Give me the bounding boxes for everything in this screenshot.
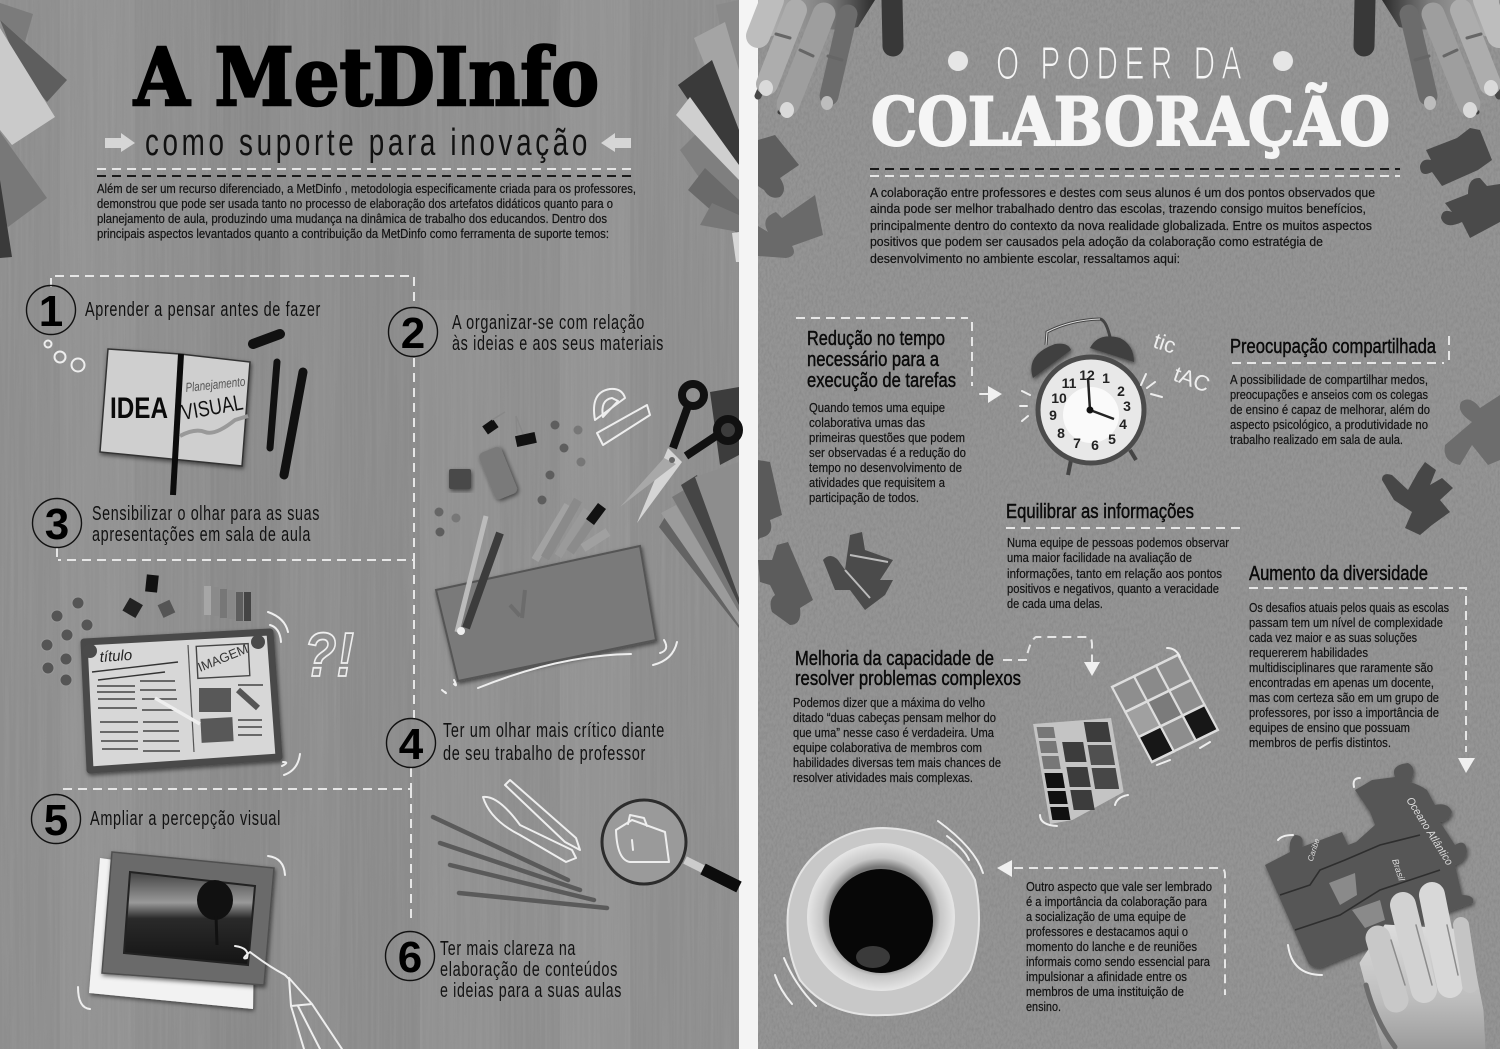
icon: alarm clock: 12	[1079, 367, 1095, 383]
intro text: principalmente dentro do contexto da nova realidade globalizada. Entre os muitos aspectos	[870, 219, 1372, 233]
section: aumento da diversidade: Aumento da diversidade	[1249, 563, 1428, 585]
section: redução no tempo: ser observadas é a redução do	[809, 446, 966, 460]
item 4	[386, 718, 665, 769]
section: preocupação compartilhada: Preocupação compartilhada	[1230, 336, 1437, 358]
section: preocupação compartilhada: trabalho realizado em sala de aula.	[1230, 433, 1403, 447]
item 6: 6	[398, 933, 422, 982]
intro text	[870, 186, 1375, 266]
icon: alarm clock: 3	[1123, 398, 1131, 414]
section: aumento da diversidade: professores, por isso a importância de	[1249, 706, 1439, 720]
intro text: Além de ser um recurso diferenciado, a MetDinfo , metodologia especificamente criada para os professores,	[97, 182, 636, 196]
paper background	[758, 0, 1500, 1049]
icon: whiteboard layout	[83, 632, 279, 770]
section: outro aspecto: informais como sendo essencial para	[1026, 955, 1210, 969]
section: melhoria da capacidade: resolver atividades mais complexas.	[793, 771, 973, 785]
item 6: e ideias para a suas aulas	[440, 980, 622, 1002]
section: melhoria da capacidade: resolver problemas complexos	[795, 668, 1021, 690]
panel: A MetDInfo	[0, 0, 739, 1049]
section: redução no tempo: primeiras questões que podem	[809, 431, 965, 445]
intro text: A colaboração entre professores e destes com seus alunos é um dos pontos observados que	[870, 186, 1375, 200]
icon: notebook: VISUAL	[180, 390, 245, 425]
section: aumento da diversidade: mas com certeza são em um grupo de	[1249, 691, 1439, 705]
section: preocupação compartilhada: preocupações e anseios com os colegas	[1230, 388, 1428, 402]
intro text: planejamento de aula, produzindo uma mudança na dinâmica de trabalho dos educandos. Dentro dos	[97, 212, 607, 226]
section: redução no tempo: tempo no desenvolvimento de	[809, 461, 962, 475]
arrow right	[105, 133, 135, 152]
icon: alarm clock	[1031, 319, 1144, 475]
section: preocupação compartilhada: aspecto psicológico, a produtividade no	[1230, 418, 1428, 432]
section: outro aspecto: professores e destacamos aqui o	[1026, 925, 1188, 939]
icon: rubik cube front	[1032, 718, 1129, 824]
intro text: positivos que podem ser causados pela adoção da colaboração como estratégia de	[870, 235, 1323, 249]
icon: cup motion strokes	[775, 821, 983, 1006]
section: aumento da diversidade: cada vez maior e as suas soluções	[1249, 631, 1417, 645]
section: preocupação compartilhada: A possibilidade de compartilhar medos,	[1230, 373, 1428, 387]
section: outro aspecto: impulsionar a afinidade entre os	[1026, 970, 1187, 984]
item 2: 2	[401, 309, 425, 358]
icon: binder clips, sharpener and pins	[434, 412, 586, 536]
section: redução no tempo	[796, 318, 972, 505]
section: melhoria da capacidade	[793, 648, 1021, 785]
item 3: Sensibilizar o olhar para as suas	[92, 503, 320, 525]
icon: motion strokes	[268, 612, 300, 775]
icon: rubik cube back	[1112, 655, 1218, 762]
title: A MetDInfo	[133, 30, 599, 124]
section: equilibrar as informações: de cada uma delas.	[1007, 597, 1103, 611]
icon: tic tac sketch	[1020, 328, 1213, 421]
item 3	[32, 498, 320, 549]
icon: tic tac sketch: tAC	[1170, 361, 1213, 397]
arrow left	[601, 133, 631, 152]
item 5	[32, 794, 281, 845]
puzzle pieces lower left	[758, 460, 893, 625]
icon: alarm clock: 5	[1108, 431, 1116, 447]
icon: white photo sheet and picture frame	[89, 852, 274, 1009]
item 1	[26, 286, 321, 336]
icon: sketched pencil	[235, 946, 342, 1049]
section: equilibrar as informações: uma maior facilidade na avaliação de	[1007, 551, 1192, 565]
icon: alarm clock: 6	[1091, 437, 1099, 453]
arrow to clock	[980, 386, 1002, 403]
section: melhoria da capacidade: equipe colaborativa de membros com	[793, 741, 982, 755]
icon: pencils	[433, 817, 607, 908]
icon: alarm clock: 2	[1117, 383, 1125, 399]
icon: thought bubbles	[44, 340, 84, 372]
section: aumento da diversidade: equipes de ensino que possuam	[1249, 721, 1410, 735]
section: redução no tempo: necessário para a	[807, 349, 940, 371]
icon: sketched question and exclamation marks: ?!	[304, 621, 354, 690]
section: redução no tempo: execução de tarefas	[807, 370, 956, 392]
item 5: 5	[44, 796, 68, 845]
item 2	[388, 308, 664, 358]
item 6	[386, 932, 622, 1002]
icon: paper sheets top right	[676, 0, 739, 262]
section: outro aspecto: é a importância da colaboração para	[1026, 895, 1207, 909]
section: melhoria da capacidade: Podemos dizer que a máxima do velho	[793, 696, 985, 710]
item 4: 4	[399, 720, 424, 769]
intro text: principais aspectos levantados quanto a contribuição da MetDinfo como ferramenta de suporte temos:	[97, 227, 609, 241]
heading top: O PODER DA	[996, 37, 1248, 89]
item 6: Ter mais clareza na	[440, 938, 576, 960]
wood background	[0, 0, 739, 1049]
icon: puzzle motion strokes	[1278, 778, 1360, 975]
icon: alarm clock: 7	[1073, 435, 1081, 451]
section: equilibrar as informações: positivos e negativos, quanto a veracidade	[1007, 582, 1219, 596]
puzzle pieces top left	[758, 135, 823, 258]
section: preocupação compartilhada: de ensino é capaz de melhorar, além do	[1230, 403, 1430, 417]
section: equilibrar as informações	[1006, 501, 1245, 611]
icon: puzzle map with hand: Oceano Atlântico	[1403, 795, 1455, 868]
section: outro aspecto: membros de uma instituição de	[1026, 985, 1184, 999]
icon: alarm clock: 4	[1119, 416, 1127, 432]
arrow to cubes	[1003, 637, 1100, 676]
icon: motion ticks	[78, 856, 285, 1009]
icon: clips, pins and sticky tabs	[41, 574, 251, 686]
icon: motion strokes under case	[442, 640, 677, 693]
icon: tic tac sketch: tic	[1150, 328, 1179, 359]
item 3: apresentações em sala de aula	[92, 524, 311, 546]
icon: puzzle map with hand	[1265, 763, 1485, 1049]
icon: notebook: IDEA	[110, 392, 168, 425]
icon: pencil case	[436, 516, 656, 681]
section: melhoria da capacidade: Melhoria da capacidade de	[795, 648, 994, 670]
section: outro aspecto: momento do lanche e de reuniões	[1026, 940, 1197, 954]
icon: whiteboard layout: título	[99, 647, 133, 666]
item 1: Aprender a pensar antes de fazer	[85, 299, 321, 321]
icon: notebook	[100, 349, 250, 495]
item 2: às ideias e aos seus materiais	[452, 333, 664, 355]
item 6: elaboração de conteúdos	[440, 959, 618, 981]
section: equilibrar as informações: Equilibrar as informações	[1006, 501, 1194, 523]
section: aumento da diversidade: membros de perfis distintos.	[1249, 736, 1391, 750]
section: outro aspecto: a socialização de uma equipe de	[1026, 910, 1186, 924]
section: redução no tempo: Quando temos uma equipe	[809, 401, 945, 415]
section: melhoria da capacidade: habilidades diversas tem mais chances de	[793, 756, 1001, 770]
section: outro aspecto	[997, 860, 1225, 1014]
icon: right hand	[1364, 0, 1499, 118]
icon: left hand	[758, 0, 893, 118]
intro text: ainda pode ser melhor trabalhado dentro das escolas, trazendo consigo muitos benefícios,	[870, 202, 1366, 216]
icon: sketch protractor and ruler	[594, 389, 650, 445]
icon: coffee cup	[788, 828, 979, 1015]
item 2: A organizar-se com relação	[452, 312, 645, 334]
icon: puzzle map with hand: Caribe	[1306, 837, 1322, 863]
icon: alarm clock: 9	[1049, 407, 1057, 423]
section: aumento da diversidade: multidisciplinares que raramente são	[1249, 661, 1433, 675]
item 4: Ter um olhar mais crítico diante	[443, 720, 665, 742]
icon: puzzle map with hand: Brasil	[1390, 858, 1407, 883]
section: aumento da diversidade	[1249, 563, 1475, 773]
subtitle: como suporte para inovação	[145, 122, 591, 164]
icon: alarm clock: 10	[1051, 390, 1067, 406]
icon: magnifying glass	[602, 800, 739, 887]
section: outro aspecto: ensino.	[1026, 1000, 1061, 1014]
icon: pens and markers	[535, 500, 608, 560]
section: aumento da diversidade: passam tem um nível de complexidade	[1249, 616, 1443, 630]
icon: alarm clock: 1	[1102, 370, 1110, 386]
section: aumento da diversidade: encontradas em apenas um docente,	[1249, 676, 1434, 690]
intro text	[97, 182, 636, 241]
puzzle pieces top right	[1420, 128, 1500, 238]
icon: notebook: Planejamento	[185, 374, 246, 395]
intro text: desenvolvimento no ambiente escolar, ressaltamos aqui:	[870, 252, 1180, 266]
section: redução no tempo: Redução no tempo	[807, 328, 945, 350]
icon: whiteboard layout: IMAGEM	[196, 641, 250, 675]
puzzle pieces middle right	[1382, 395, 1500, 535]
icon: scissors	[620, 384, 739, 523]
icon: cube motion ticks	[1040, 648, 1210, 826]
section: melhoria da capacidade: que uma” nesse caso é verdadeira. Uma	[793, 726, 994, 740]
icon: alarm clock: 8	[1057, 425, 1065, 441]
item 3: 3	[45, 500, 69, 549]
panel: O poder da colaboração	[758, 0, 1500, 1049]
icon: sketched pen and pencil	[483, 780, 580, 862]
section: preocupação compartilhada	[1230, 335, 1449, 447]
bullet left	[948, 51, 968, 71]
icon: paper sheets top left	[0, 3, 67, 258]
section: redução no tempo: atividades que requisitem a	[809, 476, 945, 490]
icon: marker pens	[253, 334, 303, 475]
icon: alarm clock: 11	[1062, 375, 1077, 391]
item 4: de seu trabalho de professor	[443, 743, 646, 765]
item 1: 1	[39, 287, 63, 336]
icon: stacked papers	[659, 462, 739, 628]
section: aumento da diversidade: Os desafios atuais pelos quais as escolas	[1249, 601, 1449, 615]
title: COLABORAÇÃO	[871, 83, 1390, 161]
section: equilibrar as informações: Numa equipe de pessoas podemos observar	[1007, 536, 1229, 550]
bullet right	[1273, 51, 1293, 71]
section: aumento da diversidade: requererem habilidades	[1249, 646, 1368, 660]
item 5: Ampliar a percepção visual	[90, 808, 281, 830]
section: outro aspecto: Outro aspecto que vale ser lembrado	[1026, 880, 1212, 894]
section: redução no tempo: participação de todos.	[809, 491, 919, 505]
section: redução no tempo: colaborativa umas das	[809, 416, 925, 430]
intro text: demonstrou que pode ser usada tanto no processo de elaboração dos artefatos didáticos quanto para o	[97, 197, 613, 211]
section: melhoria da capacidade: ditado “duas cabeças pensam melhor do	[793, 711, 996, 725]
section: equilibrar as informações: informações, tanto em relação aos pontos	[1007, 567, 1222, 581]
